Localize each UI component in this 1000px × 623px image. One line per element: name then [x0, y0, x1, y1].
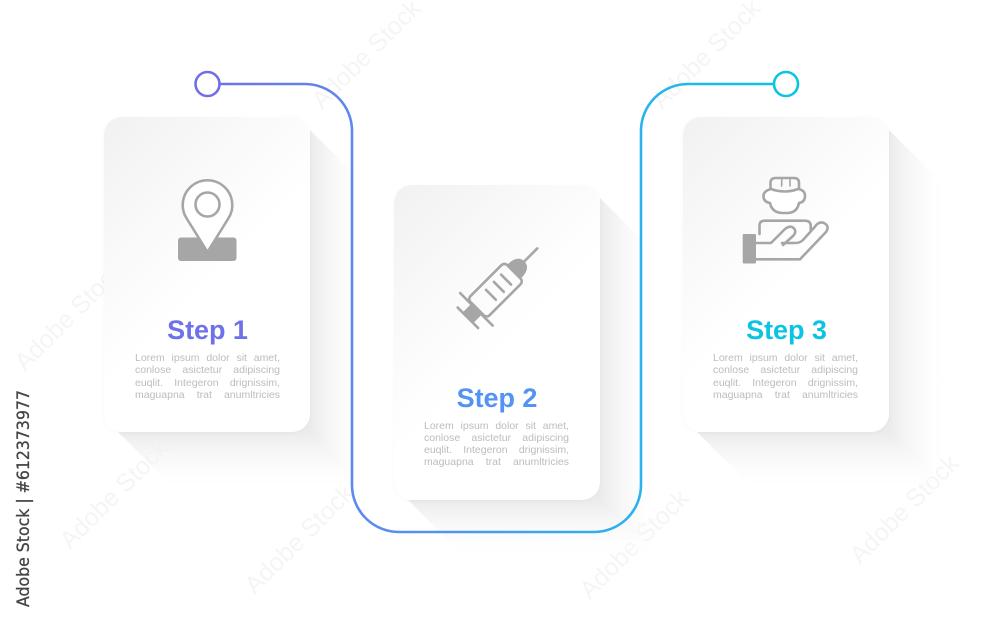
text: step 3 body: Lorem ipsum dolor sit amet, — [713, 352, 858, 364]
icon: hand holding patient — [742, 176, 829, 264]
text: step 1 body: conlose asictetur adipiscing — [135, 364, 280, 376]
watermark pattern: Adobe Stock — [54, 434, 175, 554]
text: step 3 body — [713, 352, 858, 401]
watermark pattern: Adobe Stock — [574, 484, 695, 604]
text: step 1 body — [135, 352, 280, 401]
text: step 1 body: euqlit. Integeron drignissim, — [135, 377, 280, 389]
text: step 1 body: maguapna trat anumltricies — [135, 389, 280, 401]
heading: step 1: Step 1 — [167, 315, 248, 345]
panel: step 3 card — [683, 117, 910, 454]
text: step 2 body: maguapna trat anumltricies — [424, 456, 569, 468]
heading: step 3: Step 3 — [746, 315, 827, 345]
text: step 3 body: conlose asictetur adipiscing — [713, 364, 858, 376]
panel: step 1 card — [104, 117, 332, 454]
text: step 1 body: Lorem ipsum dolor sit amet, — [135, 352, 280, 364]
heading: step 2: Step 2 — [457, 382, 537, 412]
text: step 2 body — [424, 420, 569, 468]
stock id label: Adobe Stock | #612373977 — [14, 390, 34, 607]
icon: map pin — [178, 179, 236, 261]
text: step 2 body: conlose asictetur adipiscing — [424, 432, 569, 444]
watermark pattern: Adobe Stock — [844, 449, 965, 569]
text: step 2 body: Lorem ipsum dolor sit amet, — [424, 420, 569, 432]
watermark pattern: Adobe Stock — [9, 256, 130, 376]
text: step 2 body: euqlit. Integeron drignissim, — [424, 444, 569, 456]
watermark pattern: Adobe Stock — [239, 479, 360, 599]
panel: step 2 card — [394, 185, 622, 522]
icon: syringe — [456, 247, 538, 330]
text: step 3 body: maguapna trat anumltricies — [713, 389, 858, 401]
text: step 3 body: euqlit. Integeron drignissim, — [713, 377, 858, 389]
